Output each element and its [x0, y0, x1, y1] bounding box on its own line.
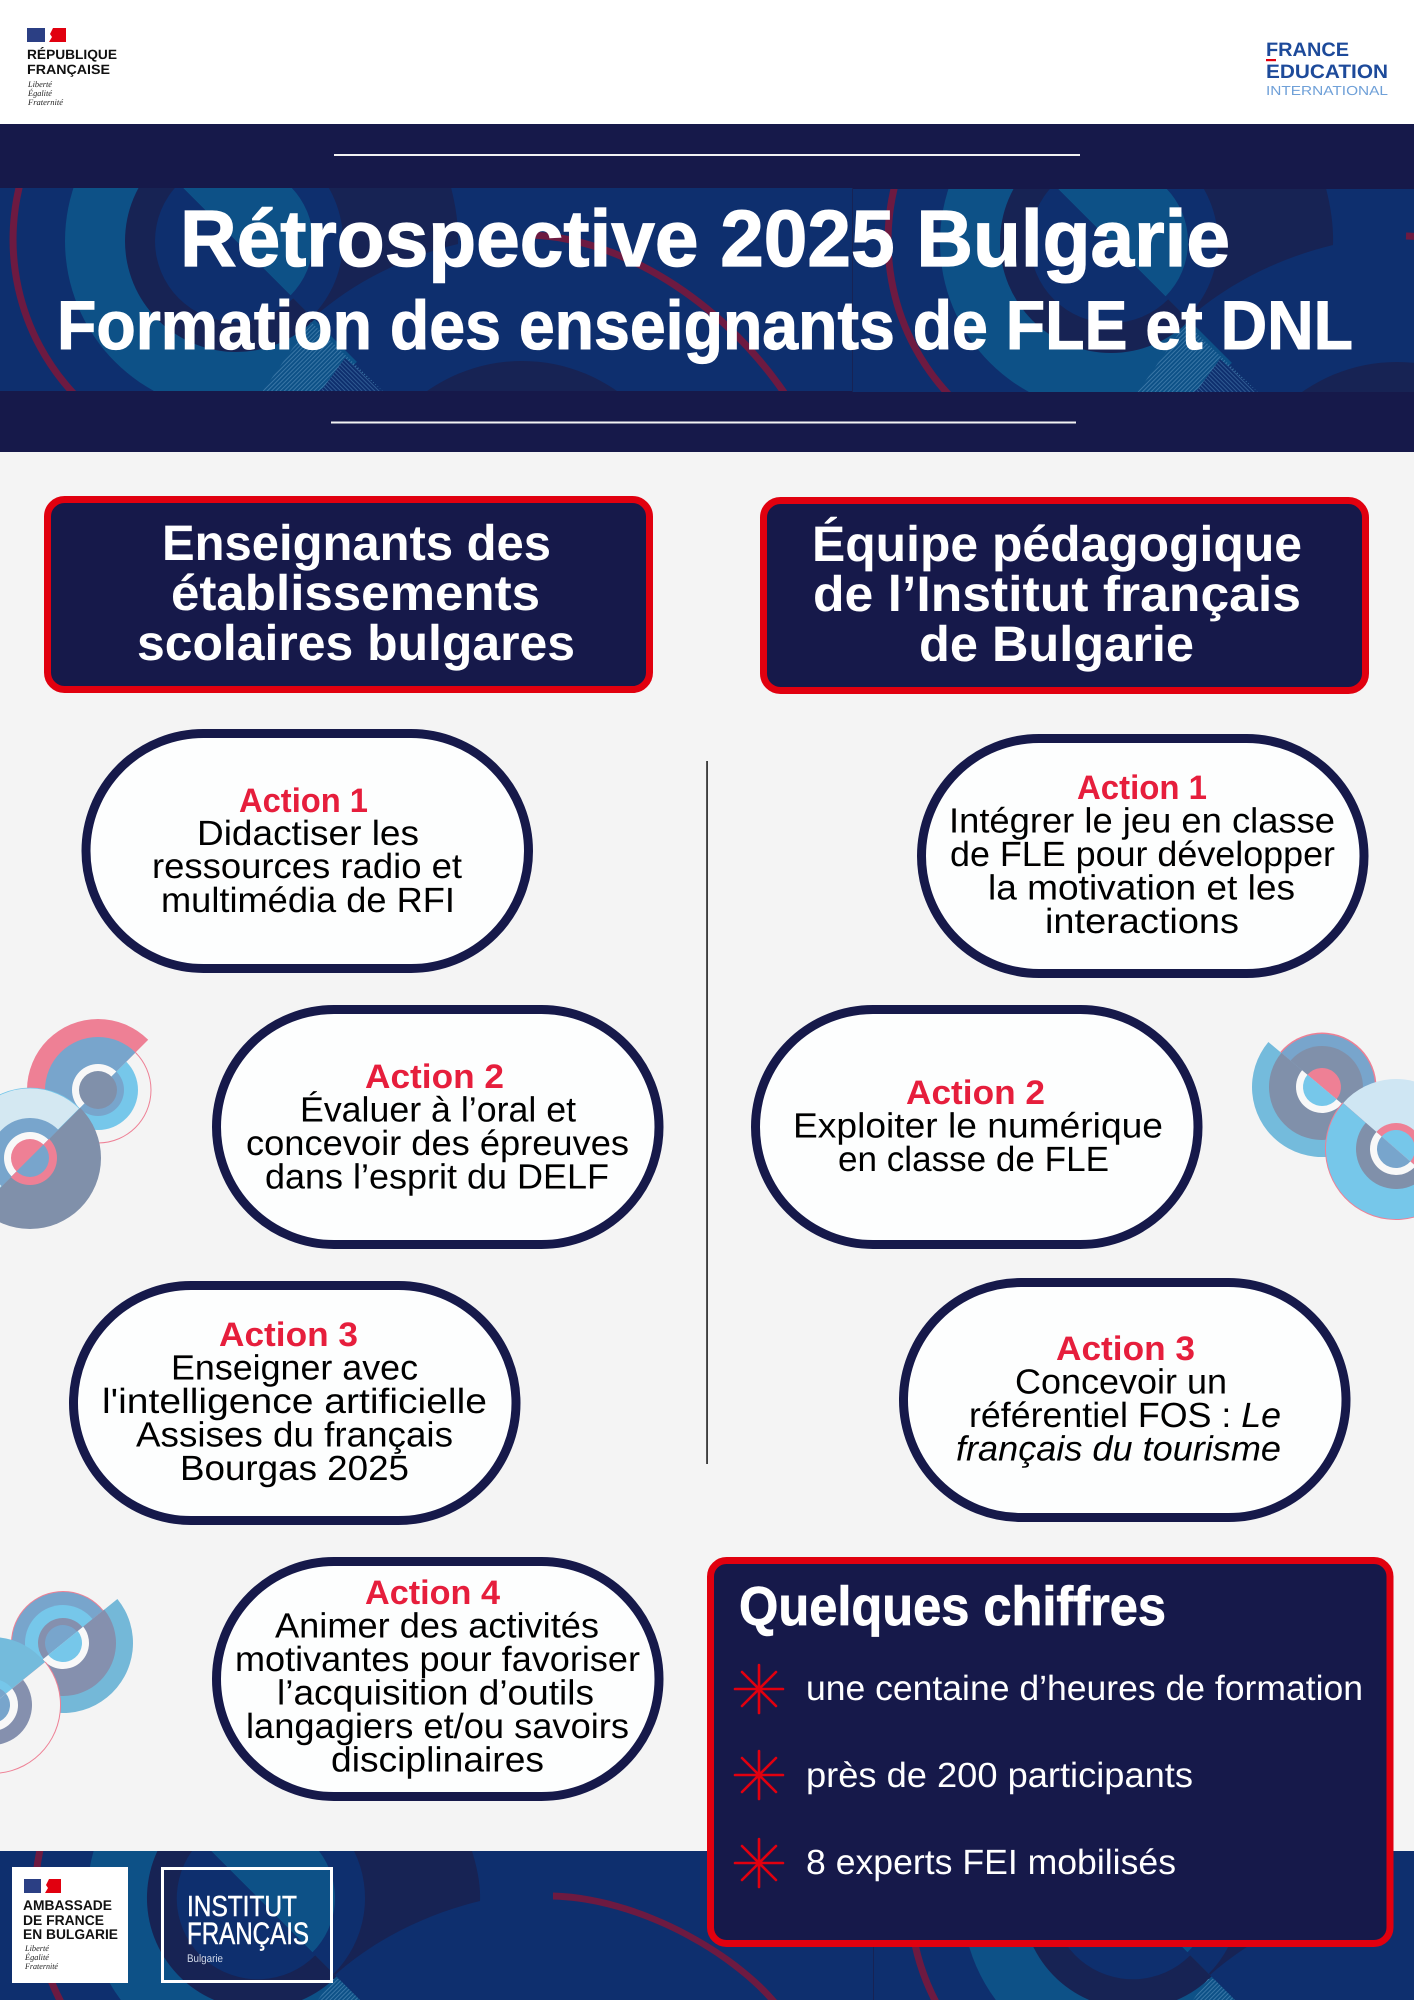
- logo: Ambassade de France en Bulgarie: Liberté: [24, 1943, 50, 1953]
- title line 1: Rétrospective 2025 Bulgarie: [180, 194, 1230, 283]
- panel: quelques chiffres: [710, 1560, 1390, 1944]
- logo: France Education International: EDUCATION: [1266, 61, 1388, 83]
- logo: France Education International: FRANCE: [1266, 39, 1349, 61]
- action pill: left 1: [86, 734, 528, 968]
- heading: équipe pédagogique: de Bulgarie: [919, 616, 1194, 672]
- action pill: right 2: [756, 1010, 1198, 1244]
- heading: enseignants: [48, 500, 650, 690]
- action pill: right 3: Action 3: [1056, 1330, 1195, 1368]
- decoration: circles right: [1223, 1000, 1414, 1249]
- stat: heures: une centaine d’heures de formation: [806, 1669, 1363, 1708]
- action pill: right 1: interactions: [1045, 902, 1239, 941]
- action pill: left 1: Didactiser les: [197, 814, 419, 853]
- action pill: left 3: Action 3: [219, 1316, 358, 1354]
- heading: enseignants: établissements: [171, 565, 540, 621]
- action pill: left 4: Action 4: [365, 1574, 500, 1612]
- icon: red asterisk 1: [735, 1665, 783, 1713]
- decoration: circles left middle: [0, 990, 186, 1258]
- action pill: left 4: motivantes pour favoriser: [235, 1640, 640, 1679]
- action pill: right 2: en classe de FLE: [838, 1140, 1109, 1179]
- icon: red asterisk 2: [735, 1751, 783, 1799]
- action pill: left 3: [74, 1286, 516, 1520]
- heading: enseignants: Enseignants des: [162, 515, 551, 571]
- action pill: left 1: multimédia de RFI: [161, 881, 455, 920]
- action pill: left 4: [216, 1562, 659, 1796]
- stat: participants: près de 200 participants: [806, 1756, 1193, 1795]
- action pill: right 1: la motivation et les: [988, 868, 1295, 908]
- divider: [706, 761, 708, 1464]
- action pill: right 2: Exploiter le numérique: [793, 1106, 1163, 1146]
- action pill: right 1: Action 1: [1077, 769, 1207, 807]
- action pill: left 3: Assises du français: [136, 1416, 453, 1454]
- logo: Ambassade de France en Bulgarie: Égalité: [24, 1952, 50, 1962]
- logo: Ambassade de France en Bulgarie: EN BULGARIE: [23, 1926, 118, 1942]
- logo: Institut français: Bulgarie: [187, 1953, 223, 1965]
- logo: République Française: Égalité: [27, 88, 53, 98]
- action pill: left 2: Évaluer à l’oral et: [300, 1090, 576, 1130]
- action pill: left 2: dans l’esprit du DELF: [265, 1158, 609, 1196]
- action pill: right 1: de FLE pour développer: [950, 835, 1335, 874]
- icon: red asterisk 3: [735, 1839, 783, 1887]
- panel heading: Quelques chiffres: [739, 1575, 1166, 1637]
- heading: enseignants: scolaires bulgares: [137, 615, 575, 671]
- top logo strip: [0, 0, 1414, 124]
- logo: Ambassade de France en Bulgarie: DE FRANCE: [23, 1912, 104, 1928]
- logo: Institut français: [162, 1868, 332, 1982]
- logo: France Education International: INTERNATIONAL: [1266, 83, 1388, 98]
- action pill: left 4: Animer des activités: [275, 1606, 599, 1646]
- decoration: circles left bottom: [0, 1559, 161, 1802]
- action pill: right 1: Intégrer le jeu en classe: [949, 802, 1335, 840]
- action pill: right 3: [904, 1282, 1346, 1518]
- logo: France Education International: [1266, 39, 1388, 98]
- action pill: left 3: l'intelligence artificielle: [102, 1382, 487, 1421]
- action pill: left 4: disciplinaires: [331, 1740, 544, 1780]
- action pill: right 3: Concevoir un: [1015, 1362, 1227, 1402]
- action pill: right 1: [922, 738, 1364, 974]
- action pill: left 4: langagiers et/ou savoirs: [246, 1707, 629, 1746]
- action pill: right 3: français du tourisme: [956, 1430, 1281, 1468]
- logo: Institut français: FRANÇAIS: [187, 1916, 309, 1951]
- title banner: [0, 124, 1414, 452]
- logo: République Française: Liberté: [27, 79, 53, 89]
- title line 2: Formation des enseignants de FLE et DNL: [57, 287, 1353, 364]
- action pill: left 1: Action 1: [239, 782, 368, 820]
- action pill: left 2: Action 2: [365, 1058, 504, 1096]
- logo: Ambassade de France en Bulgarie: [12, 1867, 128, 1983]
- action pill: left 2: [216, 1010, 659, 1244]
- action pill: left 4: l’acquisition d’outils: [277, 1674, 594, 1712]
- footer band: [0, 1851, 1414, 2000]
- action pill: left 1: ressources radio et: [152, 847, 462, 886]
- action pill: left 3: Bourgas 2025: [180, 1449, 409, 1488]
- logo: République Française: RÉPUBLIQUE: [27, 47, 117, 62]
- heading: équipe pédagogique: de l’Institut français: [813, 566, 1301, 622]
- heading: équipe pédagogique: Équipe pédagogique: [812, 516, 1302, 572]
- logo: Ambassade de France en Bulgarie: AMBASSADE: [23, 1897, 112, 1913]
- logo: Ambassade de France en Bulgarie: Fraternité: [24, 1961, 59, 1971]
- logo: République Française: Fraternité: [27, 97, 64, 107]
- heading: équipe pédagogique: [764, 500, 1366, 690]
- stat: experts: 8 experts FEI mobilisés: [806, 1843, 1176, 1882]
- logo: Institut français: INSTITUT: [187, 1891, 297, 1923]
- logo: République Française: [27, 28, 117, 107]
- action pill: left 2: concevoir des épreuves: [246, 1124, 629, 1163]
- action pill: right 2: Action 2: [906, 1074, 1045, 1112]
- action pill: right 3: référentiel FOS : Le: [969, 1396, 1281, 1435]
- action pill: left 3: Enseigner avec: [171, 1348, 418, 1388]
- logo: République Française: FRANÇAISE: [27, 62, 110, 77]
